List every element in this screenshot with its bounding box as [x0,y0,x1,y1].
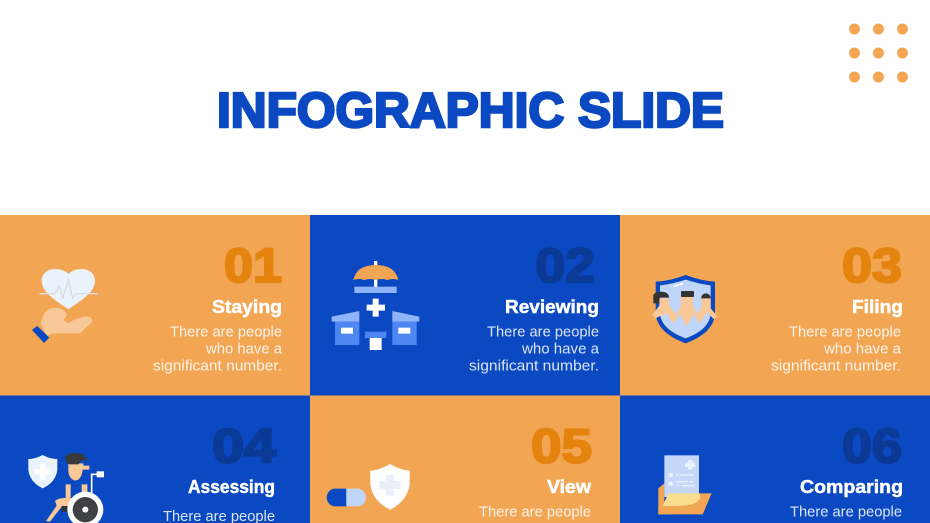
title: INFOGRAPHIC SLIDE [217,83,724,138]
body text: There are people [170,324,282,340]
panel: 04 Assessing [0,396,310,523]
icon: document in folder [658,455,712,514]
heading: Comparing [800,476,903,497]
body text: There are people [479,504,591,520]
decorative dot grid [849,24,908,82]
body text: who have a [521,340,600,358]
icon: hospital with umbrella [332,261,419,350]
panel: 05 View [310,396,620,523]
body text: who have a [205,340,283,358]
number 04: 04 [212,420,276,474]
icon: pill and shield [327,464,410,510]
body text [771,324,902,374]
body text [469,324,600,374]
heading: Filing [852,296,903,317]
heading: Assessing [188,476,275,497]
number 01: 01 [224,240,282,293]
heading: Staying [212,296,282,317]
icon: person in wheelchair with shield [28,453,104,523]
icon: heart on hand [32,269,98,343]
body text: who have a [823,340,902,358]
number 06: 06 [842,420,902,474]
heading: View [547,476,592,497]
panel: 06 Comparing [620,396,930,523]
body text: significant number. [469,358,599,374]
heading: Reviewing [505,296,599,317]
panel: 01 Staying [0,215,310,396]
number 02: 02 [536,240,595,293]
body text [153,324,283,374]
icon: people in shield [652,275,718,343]
body text: There are people [487,324,599,340]
body text: significant number. [771,358,901,374]
body text: There are people [790,504,902,520]
body text: significant number. [153,358,282,374]
panel: 02 Reviewing [310,215,620,396]
number 03: 03 [842,240,902,293]
panel: 03 Filing [620,215,930,396]
body text: There are people [789,324,901,340]
number 05: 05 [531,420,592,474]
